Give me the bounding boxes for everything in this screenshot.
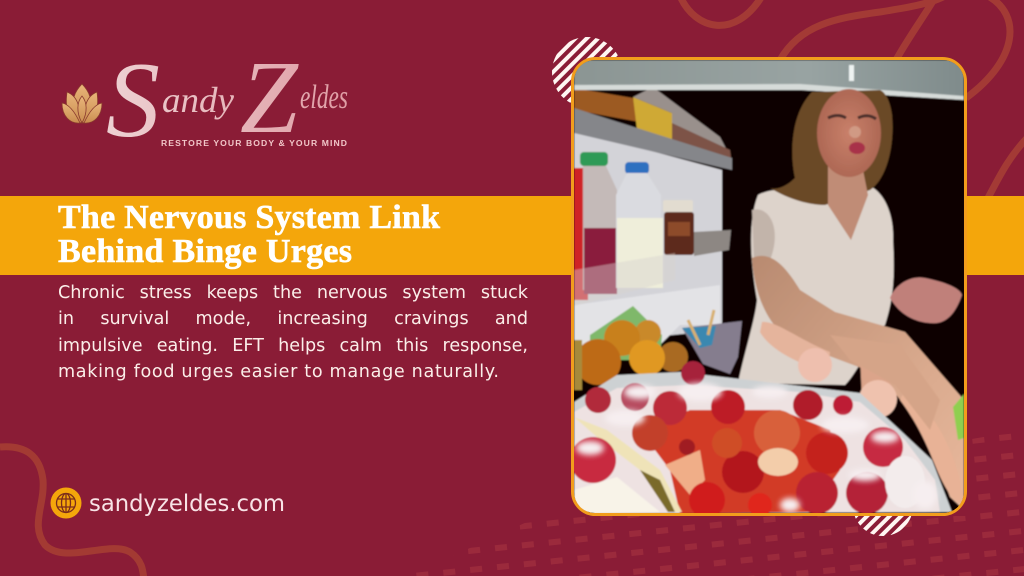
- yellow title band: [0, 196, 1024, 275]
- bottles: [574, 152, 694, 300]
- blue cup: [682, 310, 742, 374]
- body paragraph: [58, 283, 528, 382]
- door shelf rails: [574, 253, 675, 306]
- light reflections: [849, 65, 854, 81]
- body paragraph: making food urges easier to manage naturally.: [58, 362, 500, 382]
- eyes and lips: [828, 116, 876, 154]
- title: Behind Binge Urges: [58, 233, 352, 270]
- fridge vent: [574, 286, 720, 346]
- striped circle: bottom of photo: [853, 476, 913, 536]
- background curve: top right: [680, 0, 1024, 198]
- shirt shading: [752, 209, 775, 262]
- icon: globe: [50, 488, 82, 518]
- background dash pattern: [400, 430, 1024, 576]
- freezer strip: [574, 60, 964, 99]
- left arm: [752, 256, 964, 510]
- powdered sugar: [576, 383, 937, 512]
- logo tagline: RESTORE YOUR BODY & YOUR MIND: [161, 138, 347, 148]
- lettuce leaf: [953, 394, 964, 440]
- fridge top shelf items: [574, 90, 732, 158]
- shirt: [738, 187, 894, 385]
- icon: lotus: [62, 84, 102, 123]
- neck: [828, 165, 868, 240]
- logo name: Z: [240, 40, 299, 155]
- logo name: S: [106, 41, 160, 160]
- title: The Nervous System Link: [58, 199, 440, 236]
- oranges in green bag: [574, 306, 688, 390]
- fridge door wall: [574, 130, 722, 345]
- photo frame: [572, 58, 966, 514]
- plate: [574, 372, 952, 514]
- body paragraph: impulsive eating. EFT helps calm this response,: [58, 336, 528, 356]
- striped circle: top left of photo: [552, 37, 622, 107]
- right hand: [890, 277, 962, 323]
- logo name: eldes: [300, 79, 348, 116]
- freezer strip highlight: [574, 84, 964, 100]
- brand logo: [62, 40, 348, 160]
- face: [817, 89, 881, 177]
- photo: woman reaching for dessert in a fridge: [570, 60, 964, 518]
- hand fingers: [760, 322, 948, 492]
- body paragraph: in survival mode, increasing cravings and: [58, 309, 528, 329]
- dessert: [570, 361, 940, 518]
- body paragraph: Chronic stress keeps the nervous system stuck: [58, 283, 528, 303]
- logo name: andy: [162, 80, 234, 120]
- website url: sandyzeldes.com: [89, 491, 285, 517]
- fridge shelf: [574, 108, 732, 170]
- hair: [770, 90, 893, 205]
- background curve: bottom left: [0, 447, 144, 576]
